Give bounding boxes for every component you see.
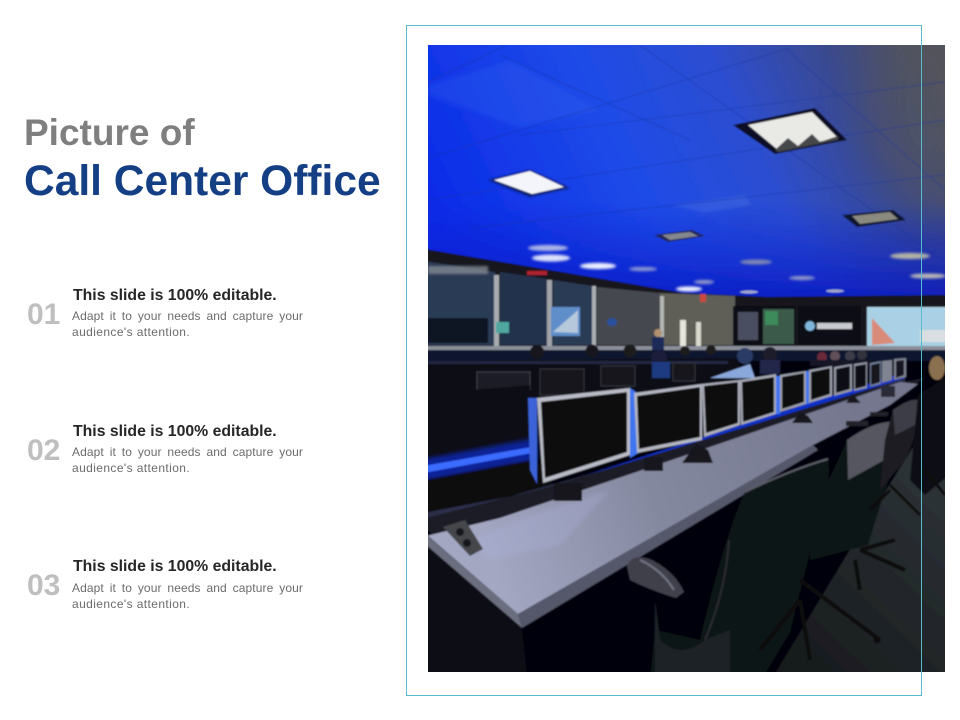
- item 02 heading: This slide is 100% editable.: [73, 423, 277, 440]
- ceiling lights: [488, 108, 946, 294]
- floor: [776, 446, 945, 672]
- list item 02: [27, 423, 303, 475]
- back row of desks and people: [418, 329, 955, 462]
- item 01 text: audience's attention.: [72, 325, 190, 339]
- chair 2: [810, 422, 905, 590]
- desk equipment: [443, 386, 895, 556]
- row of monitors: [528, 358, 906, 484]
- title line 1: Picture of: [24, 112, 195, 153]
- office chairs: [627, 356, 955, 682]
- item 02 text: [72, 445, 303, 475]
- back wall with windows: [418, 248, 955, 350]
- chair 1: [627, 459, 880, 682]
- list item 01: [27, 287, 303, 339]
- list item 03: [27, 558, 303, 611]
- number 01: 01: [27, 298, 60, 331]
- item 03 text: Adapt it to your needs and capture your: [72, 581, 303, 595]
- item 01 text: Adapt it to your needs and capture your: [72, 309, 303, 323]
- item 02 text: audience's attention.: [72, 461, 190, 475]
- item 01 heading: This slide is 100% editable.: [73, 287, 277, 304]
- number 03: 03: [27, 569, 60, 602]
- chair 3 and further chairs: [870, 356, 955, 515]
- long desk: [418, 378, 925, 682]
- blue light strip: [428, 374, 906, 512]
- item 03 text: audience's attention.: [72, 597, 190, 611]
- title: [24, 112, 381, 205]
- outline frame: [406, 26, 922, 696]
- item 03 heading: This slide is 100% editable.: [73, 558, 277, 575]
- item 02 text: Adapt it to your needs and capture your: [72, 445, 303, 459]
- title line 2: Call Center Office: [24, 158, 381, 205]
- photo: call center office: [406, 25, 945, 696]
- item 03 text: [72, 581, 303, 611]
- number 02: 02: [27, 434, 60, 467]
- ceiling: [418, 0, 960, 297]
- item 01 text: [72, 309, 303, 339]
